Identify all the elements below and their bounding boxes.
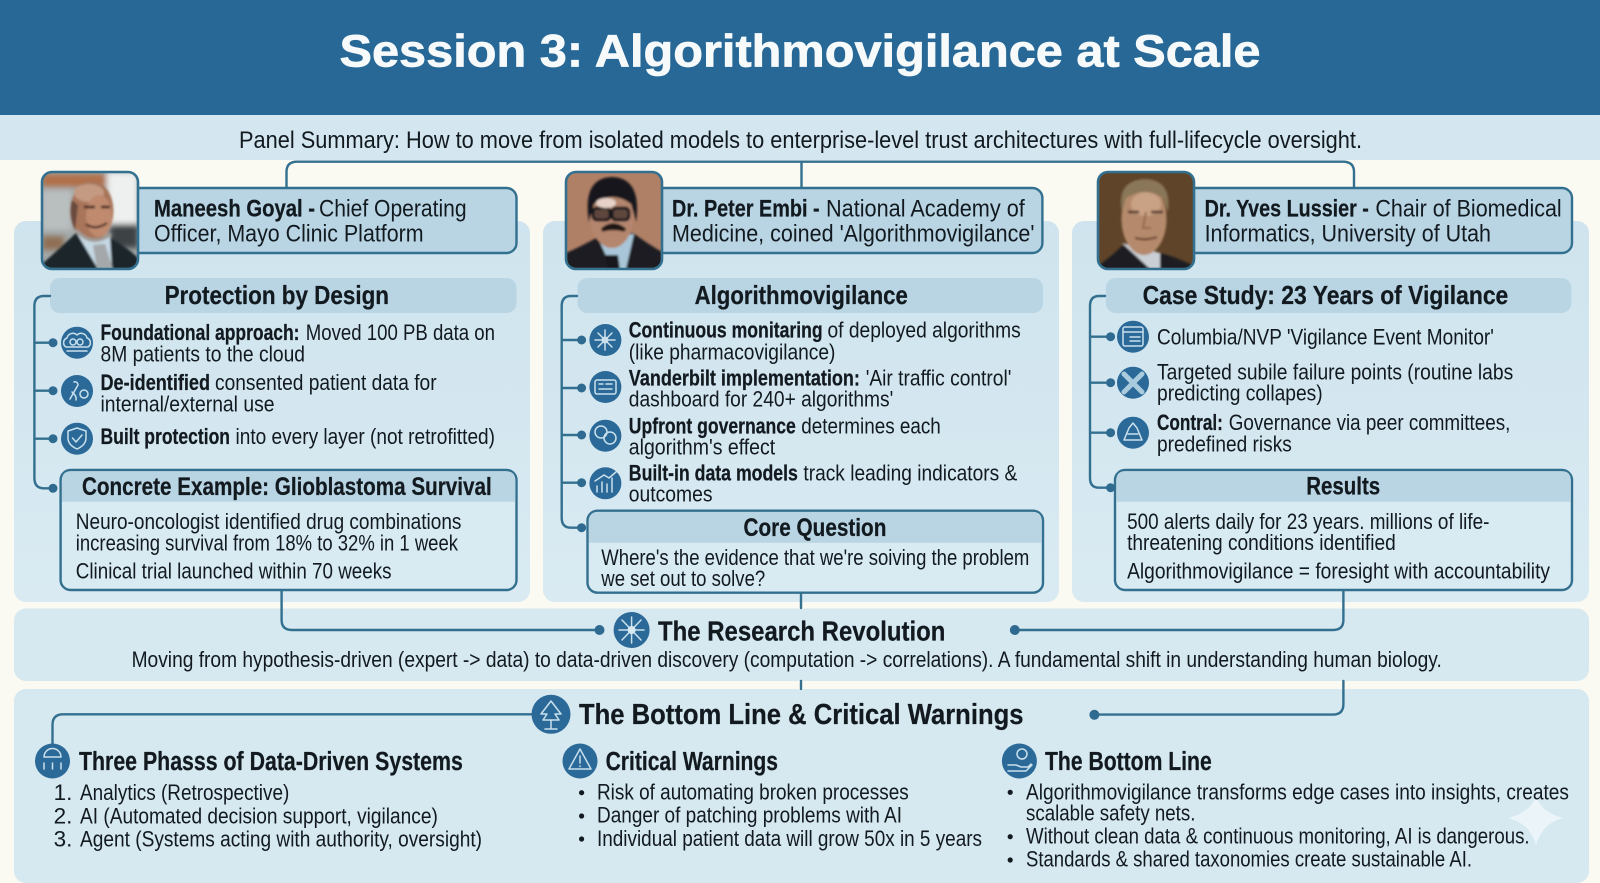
- speaker name box: Dr. Peter Embi -: [672, 196, 820, 223]
- bullet: upfront governance: algorithm's effect: [629, 434, 775, 459]
- callout: results: Results: [1306, 472, 1380, 500]
- icon: shield: [61, 423, 93, 455]
- speaker name box: Maneesh Goyal -: [154, 196, 315, 223]
- callout: core question: Core Question: [744, 514, 886, 542]
- callout: results: 500 alerts daily for 23 years. millions of life-: [1127, 509, 1489, 534]
- bullet: foundational approach: 8M patients to the cloud: [100, 342, 305, 367]
- bullet: targeted failure points: predicting collapes): [1157, 381, 1323, 406]
- bullet: built-in data models: Built-in data models: [629, 461, 798, 486]
- icon: network: [589, 324, 621, 356]
- speaker name box: [650, 188, 1042, 253]
- callout: results: [1115, 470, 1572, 590]
- bracket connector: [562, 296, 586, 532]
- panel summary band: Panel Summary: How to move from isolated models to enterprise-level trust architectures with full-lifecycle oversight.: [239, 127, 1362, 154]
- icon: de-identified data: [61, 375, 93, 407]
- callout: concrete example: [61, 470, 516, 590]
- speaker name box: Dr. Yves Lussier -: [1205, 196, 1369, 223]
- bullet: built protection: Built protection: [100, 424, 230, 449]
- phases list: Agent (Systems acting with authority, oversight): [80, 827, 482, 852]
- bullet: foundational approach: Foundational approach:: [100, 320, 300, 345]
- panel background: Goyal: [14, 221, 530, 602]
- bullet: de-identified: De-identified: [100, 370, 210, 395]
- column: three phases: [35, 744, 482, 852]
- section heading: Algorithmovigilance: [695, 280, 908, 310]
- icon: failure points: [1117, 367, 1149, 399]
- icon: bar chart: [589, 467, 621, 499]
- bullet: vigilance event monitor: Columbia/NVP 'Vigilance Event Monitor': [1157, 324, 1494, 349]
- speaker name box: Chair of Biomedical: [1375, 196, 1562, 223]
- callout: core question: [588, 511, 1043, 593]
- connector: summary to speakers: [286, 162, 1354, 188]
- column: Yves Lussier: [1090, 172, 1572, 590]
- title banner: Session 3: Algorithmovigilance at Scale: [340, 26, 1260, 77]
- speaker name box: [1180, 188, 1572, 253]
- bullet: Vanderbilt implementation: [629, 365, 1011, 412]
- connector: panels to research revolution: [282, 590, 1343, 635]
- icon: research network: [614, 612, 650, 648]
- bullet: foundational approach: Moved 100 PB data on: [306, 320, 495, 345]
- icon: tree: [532, 695, 570, 734]
- phases list: AI (Automated decision support, vigilance): [80, 803, 438, 828]
- bullet: continuous monitoring: (like pharmacovigilance): [629, 339, 835, 364]
- icon: dashboard: [589, 371, 621, 403]
- warnings list: Risk of automating broken processes: [597, 779, 909, 804]
- section heading: Protection by Design: [165, 280, 389, 310]
- icon: phases: [35, 744, 70, 778]
- bullet: control: Governance via peer committees,: [1229, 410, 1510, 435]
- callout: concrete example: Clinical trial launched within 70 weeks: [76, 558, 392, 583]
- column: the bottom line: [1002, 744, 1569, 872]
- callout: concrete example: Neuro-oncologist identified drug combinations: [76, 509, 461, 534]
- bottom line section: [35, 695, 1569, 872]
- icon: cloud data: [61, 327, 93, 359]
- bullet: continuous monitoring: Continuous monitaring: [629, 318, 823, 343]
- bullet: built-in data models: track leading indicators &: [803, 461, 1018, 486]
- panel background: Lussier: [1072, 221, 1589, 602]
- bullet: de-identified: [100, 370, 437, 417]
- phases list: 2.: [54, 803, 72, 828]
- title banner: [0, 0, 1600, 115]
- bullet: continuous monitoring: of deployed algorithms: [828, 318, 1021, 343]
- bullet: continuous monitoring: [629, 318, 1021, 364]
- column: critical warnings: [562, 744, 982, 851]
- bullet: Vanderbilt implementation: Vanderbilt implementation:: [629, 365, 860, 390]
- bullet: Vanderbilt implementation: 'Air traffic control': [866, 365, 1011, 390]
- column: Peter Embi: [562, 172, 1043, 593]
- panel summary band: [0, 115, 1600, 160]
- speaker name box: Officer, Mayo Clinic Platform: [154, 221, 424, 248]
- bullet: built protection: [100, 424, 495, 449]
- band background: research revolution: [14, 608, 1589, 681]
- phases list: 3.: [54, 827, 72, 852]
- section heading: Case Study: 23 Years of Vigilance: [1143, 280, 1508, 310]
- phases list: Analytics (Retrospective): [80, 780, 289, 805]
- speaker name box: Informatics, University of Utah: [1205, 221, 1491, 248]
- warnings heading: Critical Warnings: [606, 748, 778, 776]
- bullet: control: Contral:: [1157, 410, 1223, 435]
- warnings list: Individual patient data will grow 50x in 5 years: [597, 826, 982, 851]
- callout: core question: we set out to solve?: [600, 566, 765, 591]
- bullet: upfront governance: [629, 413, 941, 459]
- bracket connector: [1090, 296, 1115, 492]
- bullet: built-in data models: [629, 461, 1018, 507]
- bullet: built protection: into every layer (not retrofitted): [236, 424, 495, 449]
- speaker photo: [566, 172, 662, 269]
- bottom line subheading: The Bottom Line: [1045, 748, 1212, 776]
- icon: hand with coin: [1002, 744, 1037, 778]
- callout: concrete example: increasing survival from 18% to 32% in 1 week: [76, 531, 459, 556]
- panel background: Embi: [543, 221, 1059, 602]
- speaker name box: Chief Operating: [319, 196, 467, 223]
- warnings list: [579, 779, 982, 851]
- bullet: Vanderbilt implementation: dashboard for 240+ algorithms': [629, 387, 893, 412]
- bracket connector: [34, 296, 58, 493]
- section heading: [50, 278, 516, 313]
- bottom line heading: The Bottom Line & Critical Warnings: [579, 699, 1024, 731]
- bullet: control: [1157, 410, 1510, 457]
- phases list: 1.: [54, 780, 72, 805]
- callout: results: Algorithmovigilance = foresight with accountability: [1127, 558, 1550, 583]
- band background: bottom line: [14, 689, 1589, 883]
- bullet: de-identified: internal/external use: [100, 392, 274, 417]
- bullet: de-identified: consented patient data for: [215, 370, 437, 395]
- research heading: The Research Revolution: [658, 616, 945, 647]
- bullet: built-in data models: outcomes: [629, 482, 712, 507]
- warnings list: Danger of patching problems with AI: [597, 803, 902, 828]
- callout: core question: Where's the evidence that we're soiving the problem: [601, 545, 1029, 570]
- speaker name box: Medicine, coined 'Algorithmovigilance': [672, 221, 1034, 248]
- icon: peer committee: [1117, 417, 1149, 449]
- phases heading: Three Phasss of Data-Driven Systems: [79, 748, 463, 776]
- column: Maneesh Goyal: [34, 172, 517, 590]
- phases list: [54, 780, 482, 852]
- bullet: targeted failure points: Targeted subile failure points (routine labs: [1157, 359, 1513, 384]
- connector: research revolution to bottom line: [52, 681, 1343, 745]
- section heading: [578, 278, 1043, 313]
- icon: governance: [589, 420, 621, 452]
- speaker photo: [42, 172, 138, 269]
- bullet: upfront governance: Upfront governance: [629, 413, 796, 438]
- icon: event monitor: [1117, 321, 1149, 353]
- speaker name box: [125, 188, 516, 253]
- icon: sparkle watermark: [1508, 796, 1563, 846]
- bottom line list: Standards & shared taxonomies create sustainable AI.: [1026, 847, 1472, 872]
- speaker name box: National Academy of: [826, 196, 1025, 223]
- speaker photo: [1098, 172, 1194, 269]
- callout: concrete example: Concrete Example: Glioblastoma Survival: [82, 473, 492, 501]
- bullet: control: predefined risks: [1157, 432, 1292, 457]
- bottom line list: scalable safety nets.: [1026, 801, 1195, 826]
- research revolution section: [132, 612, 1442, 672]
- bullet: upfront governance: determines each: [801, 413, 941, 438]
- icon: warning triangle: [562, 744, 598, 778]
- bottom line list: [1008, 779, 1569, 872]
- bullet: foundational approach: [100, 320, 495, 367]
- callout: results: threatening conditions identified: [1127, 530, 1396, 555]
- bullet: targeted failure points: [1157, 359, 1513, 406]
